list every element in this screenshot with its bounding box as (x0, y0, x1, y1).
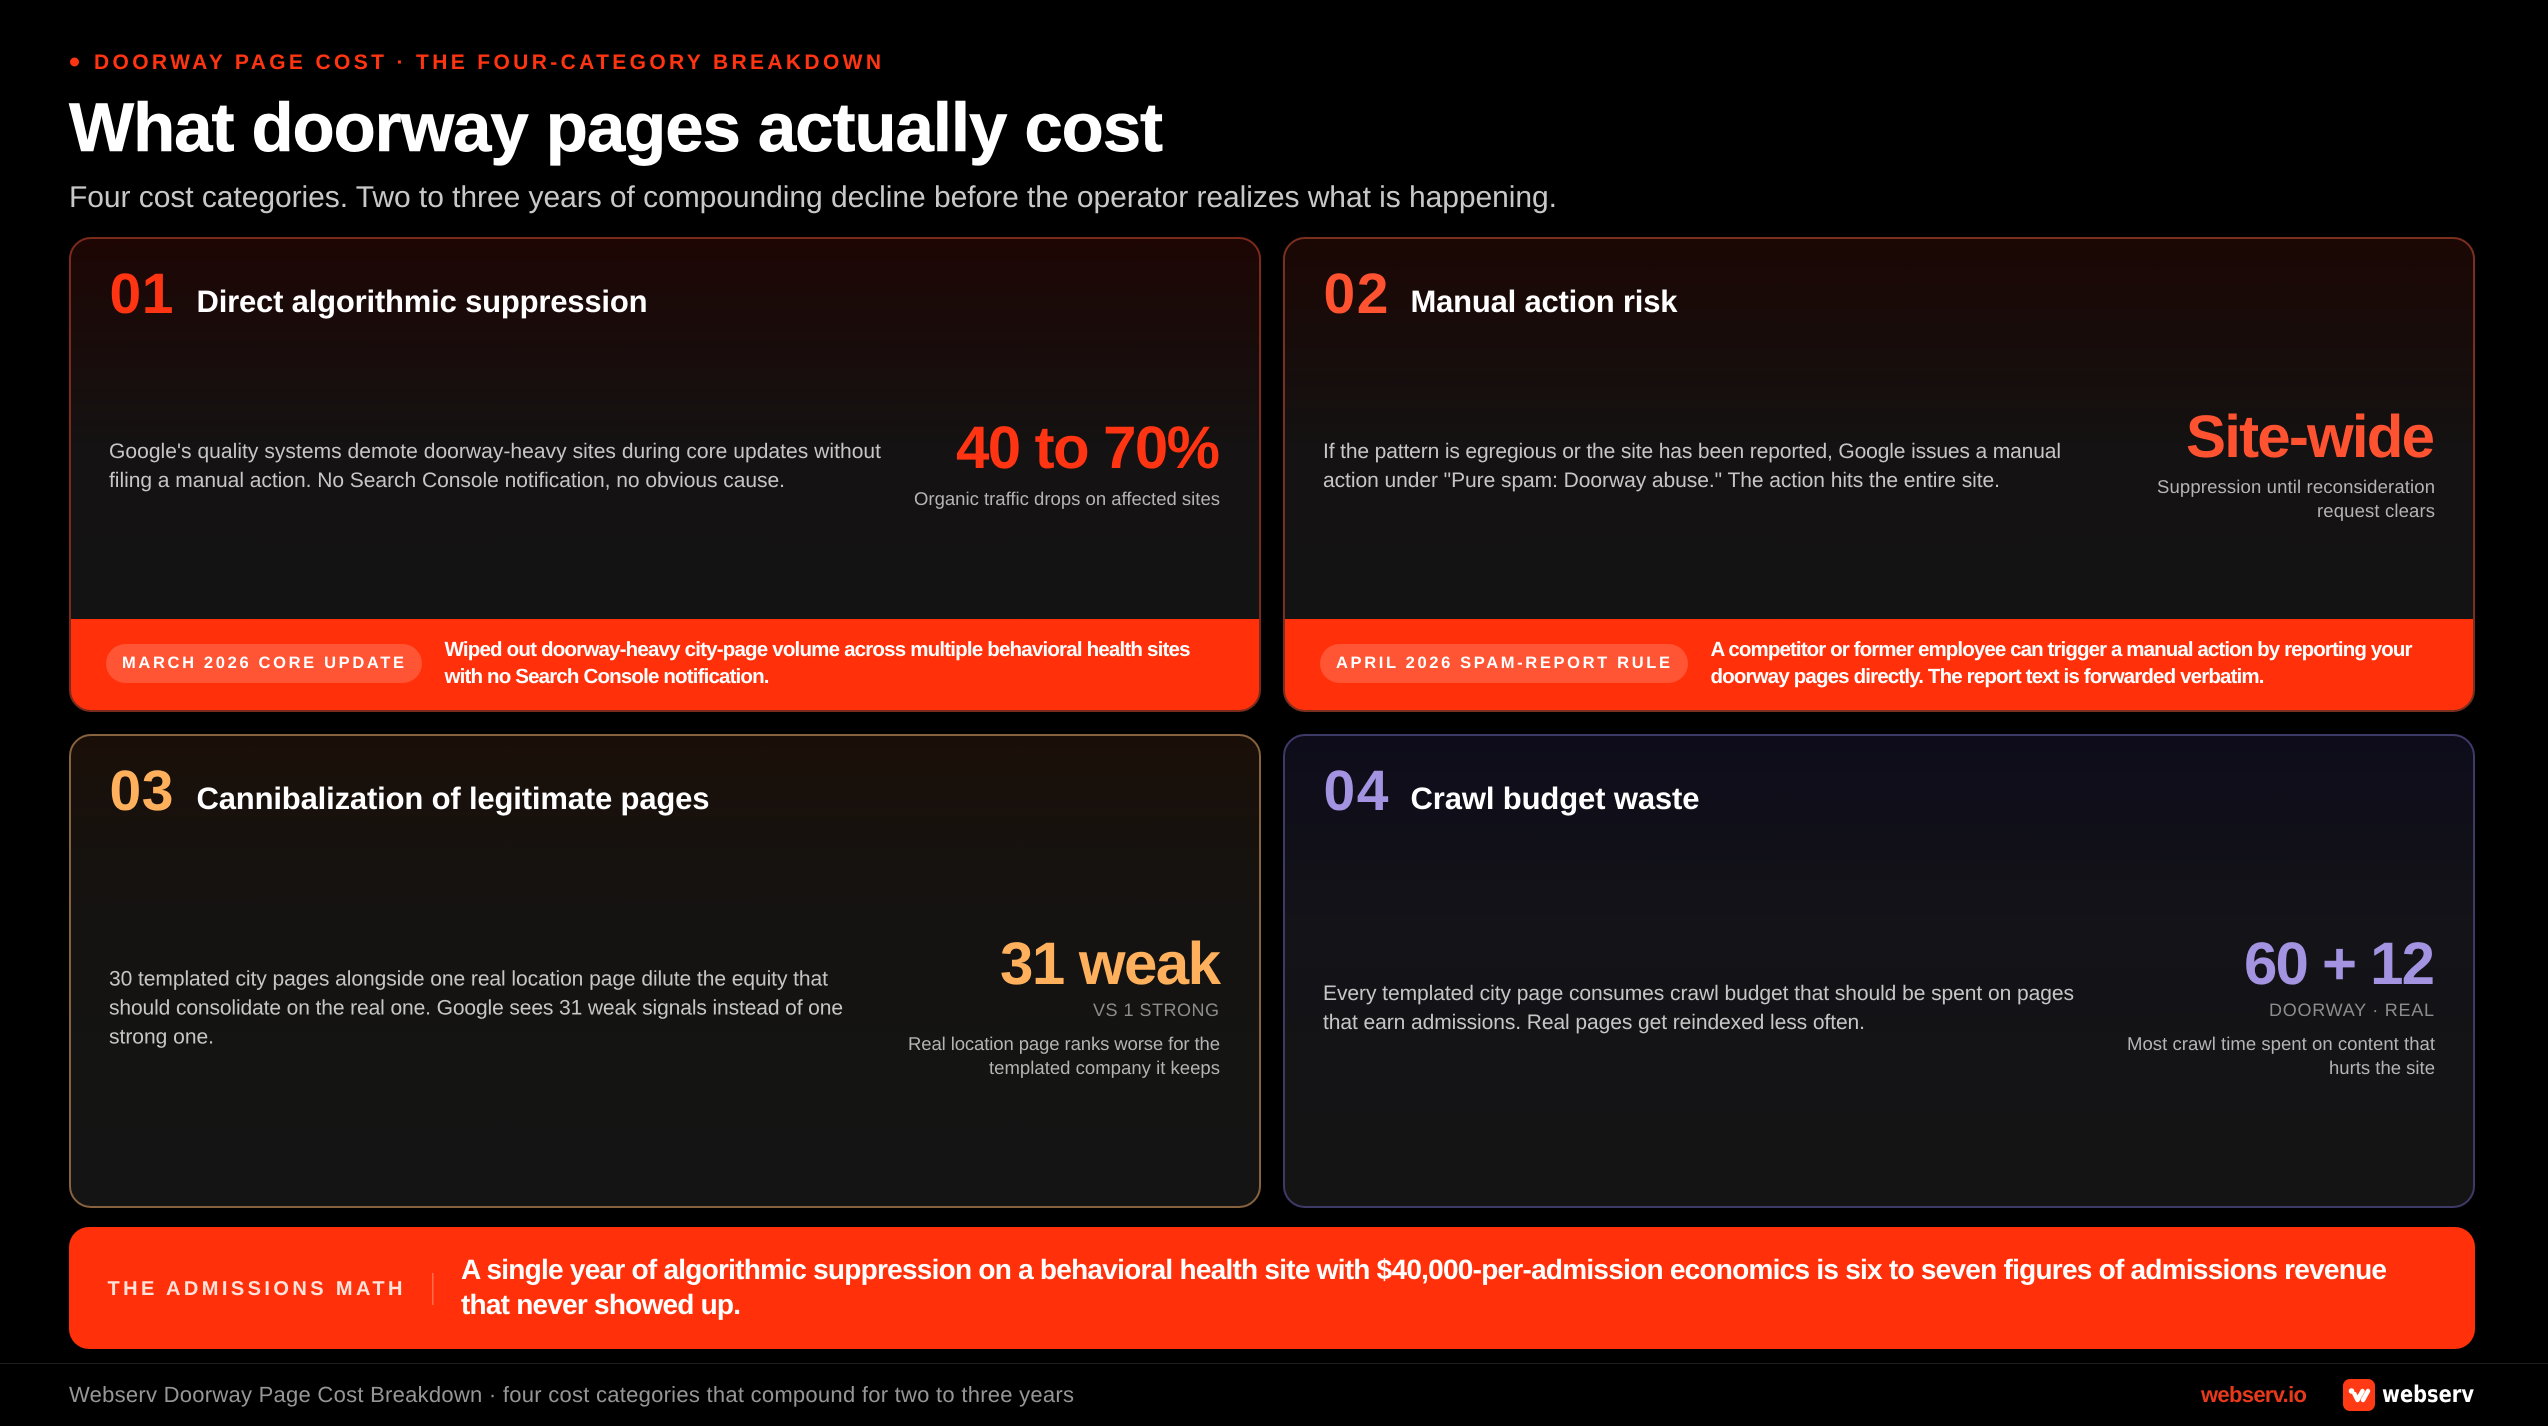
stat caption: templated company it keeps (989, 1057, 1220, 1078)
body text (109, 440, 881, 492)
stat caption (2127, 1033, 2435, 1078)
pill (106, 644, 422, 683)
callout text: with no Search Console notification. (444, 665, 770, 688)
stat caption: hurts the site (2329, 1057, 2435, 1078)
heading: Cannibalization of legitimate pages (196, 781, 710, 816)
stat caption (2157, 476, 2435, 521)
stat caption: Suppression until reconsideration (2157, 476, 2435, 497)
footer source note: Webserv Doorway Page Cost Breakdown · four cost categories that compound for two to three years (69, 1382, 1074, 1407)
callout text: Wiped out doorway-heavy city-page volume across multiple behavioral health sites (444, 638, 1190, 661)
stat caption: request clears (2317, 500, 2435, 521)
heading: Crawl budget waste (1410, 781, 1700, 816)
body text: If the pattern is egregious or the site has been reported, Google issues a manual (1323, 440, 2061, 463)
callout text (444, 638, 1190, 688)
heading: Direct algorithmic suppression (196, 284, 648, 319)
stat caption: Organic traffic drops on affected sites (914, 488, 1220, 509)
footer link: webserv.io (2200, 1382, 2307, 1407)
logo wordmark: webserv (2382, 1382, 2474, 1408)
body text: 30 templated city pages alongside one real location page dilute the equity that (109, 968, 828, 990)
red callout strip (70, 619, 1260, 711)
stat: 31 weak (1000, 930, 1222, 997)
body text: that earn admissions. Real pages get reindexed less often. (1323, 1011, 1865, 1034)
callout text: doorway pages directly. The report text is forwarded verbatim. (1710, 665, 2264, 688)
body text: Every templated city page consumes crawl budget that should be spent on pages (1323, 982, 2074, 1005)
heading: Manual action risk (1410, 284, 1678, 319)
stat caption: Real location page ranks worse for the (908, 1033, 1220, 1054)
pill: MARCH 2026 CORE UPDATE (122, 654, 404, 672)
pill: APRIL 2026 SPAM-REPORT RULE (1336, 654, 1670, 672)
title: What doorway pages actually cost (69, 89, 1163, 166)
panel: 02 manual action risk (1284, 238, 2474, 711)
icon: webserv logo mark (2343, 1379, 2375, 1411)
number: 02 (1324, 262, 1388, 326)
number: 03 (110, 759, 174, 823)
body text: Google's quality systems demote doorway-heavy sites during core updates without (109, 440, 881, 463)
banner label: THE ADMISSIONS MATH (108, 1278, 402, 1300)
footer (69, 1379, 2474, 1411)
stat: 40 to 70% (956, 414, 1220, 481)
stat: 60 + 12 (2244, 930, 2435, 997)
banner text: A single year of algorithmic suppression on a behavioral health site with $40,000-per-admission economics is six to seven figures of admissions revenue (461, 1254, 2387, 1285)
body text: should consolidate on the real one. Google sees 31 weak signals instead of one (109, 996, 843, 1020)
callout text: A competitor or former employee can trigger a manual action by reporting your (1710, 638, 2413, 661)
body text: strong one. (109, 1026, 214, 1048)
stat caption: Most crawl time spent on content that (2127, 1033, 2435, 1054)
callout banner: the admissions math (69, 1227, 2475, 1349)
subtitle: Four cost categories. Two to three years of compounding decline before the operator realizes what is happening. (69, 181, 1557, 214)
number: 01 (110, 262, 174, 326)
body text (109, 968, 843, 1048)
stat sublabel: DOORWAY · REAL (2269, 1000, 2434, 1020)
stat caption (908, 1033, 1220, 1078)
panel: 04 crawl budget waste (1284, 735, 2474, 1207)
body text (1323, 982, 2074, 1034)
header (69, 51, 1557, 214)
body text: filing a manual action. No Search Console notification, no obvious cause. (109, 469, 785, 492)
banner text (461, 1254, 2387, 1320)
pill (1320, 644, 1688, 683)
body text: action under "Pure spam: Doorway abuse." The action hits the entire site. (1323, 469, 2000, 492)
stat: Site-wide (2186, 403, 2435, 470)
banner text: that never showed up. (461, 1289, 741, 1320)
body text (1323, 440, 2061, 492)
callout text (1710, 638, 2413, 688)
panel: 01 direct algorithmic suppression (70, 238, 1260, 711)
eyebrow dot (70, 58, 79, 66)
stat sublabel: VS 1 STRONG (1093, 1000, 1219, 1020)
eyebrow: DOORWAY PAGE COST · THE FOUR-CATEGORY BREAKDOWN (94, 51, 881, 74)
red callout strip (1284, 619, 2474, 711)
number: 04 (1324, 759, 1389, 823)
panel: 03 cannibalization of legitimate pages (70, 735, 1260, 1207)
